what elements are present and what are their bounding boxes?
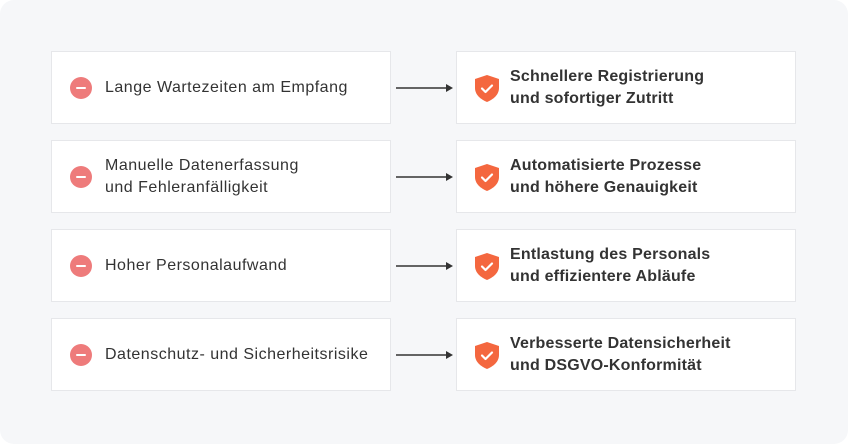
row 1 problem	[51, 51, 391, 124]
row 3 solution: und effizientere Abläufe	[510, 268, 696, 284]
row 4 solution: Verbesserte Datensicherheit	[510, 334, 731, 352]
row 1 problem: Lange Wartezeiten am Empfang	[105, 78, 348, 96]
row 3 problem	[51, 229, 391, 302]
row 4 solution: und DSGVO-Konformität	[510, 356, 702, 374]
row 1 solution: Schnellere Registrierung	[510, 68, 704, 84]
row 2 problem: und Fehleranfälligkeit	[105, 178, 268, 196]
row 1 solution: und sofortiger Zutritt	[510, 90, 674, 106]
row 4 solution	[456, 318, 796, 391]
row 4 problem: Datenschutz- und Sicherheitsrisike	[105, 346, 368, 362]
row 4 problem	[51, 318, 391, 391]
arrow 2	[396, 173, 453, 181]
row 2 problem	[51, 140, 391, 213]
row 2 solution: Automatisierte Prozesse	[510, 156, 701, 174]
arrow 1	[396, 84, 453, 92]
row 3 solution: Entlastung des Personals	[510, 246, 710, 262]
row 2 solution: und höhere Genauigkeit	[510, 178, 698, 196]
row 2 problem: Manuelle Datenerfassung	[105, 156, 299, 174]
arrow 3	[396, 262, 453, 270]
row 3 problem: Hoher Personalaufwand	[105, 256, 287, 274]
row 3 solution	[456, 229, 796, 302]
row 2 solution	[456, 140, 796, 213]
arrow 4	[396, 351, 453, 359]
row 1 solution	[456, 51, 796, 124]
